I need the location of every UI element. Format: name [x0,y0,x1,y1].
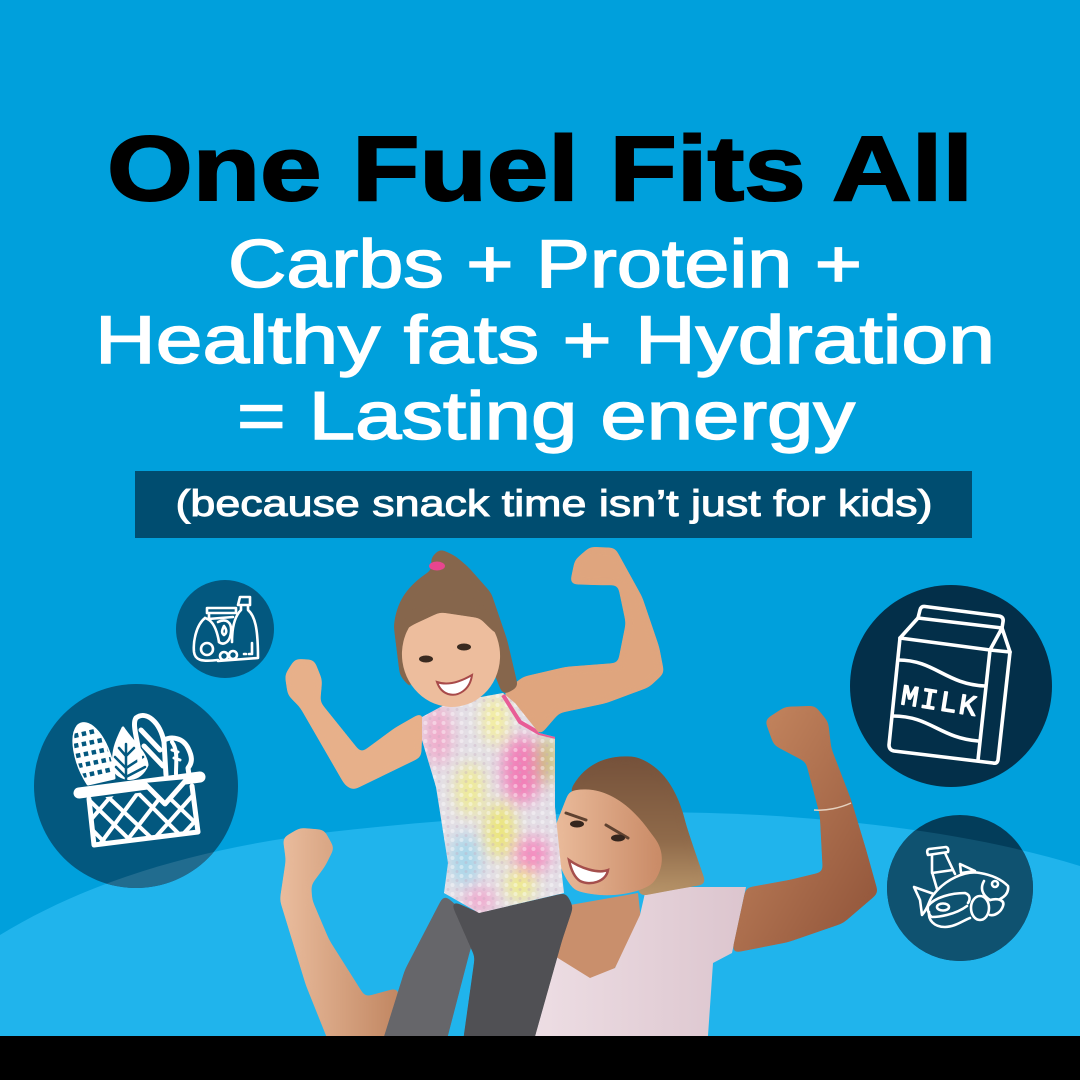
mother: bracelet [814,803,851,810]
mother: features [566,813,628,883]
subtitle [95,226,995,454]
subtitle: Carbs + Protein + [228,226,862,302]
girl: left leg [380,895,479,1050]
girl: features [419,644,472,695]
mother: left arm [280,828,402,1050]
icon: grain basket [34,684,238,888]
subtitle: Healthy fats + Hydration [95,302,995,378]
icon: milk carton: MILK [898,680,979,725]
girl: fringe [398,590,502,640]
mother: face [555,790,662,895]
girl: hair [394,549,518,698]
tagline banner: (because snack time isn’t just for kids) [176,483,932,524]
title: One Fuel Fits All [107,118,973,220]
icon: fish, meat and egg [887,815,1033,961]
tagline banner [135,471,972,538]
girl: face [395,597,507,713]
girl: right leg [450,893,573,1050]
subtitle: = Lasting energy [237,378,855,454]
girl: hair tie [429,562,445,570]
girl: patterned top [415,690,565,920]
mother and daughter flexing [280,547,878,1050]
mother: chest skin [555,893,642,985]
mother: ponytail [570,757,706,896]
icon: healthy fats [176,580,274,678]
mother: right arm [732,706,878,953]
light blue hill [0,812,1080,1040]
bottom bar [0,1036,1080,1080]
icon: milk carton [850,585,1052,787]
girl: right arm [503,547,664,735]
girl: left arm [285,659,423,790]
mother: t-shirt [520,887,746,1050]
